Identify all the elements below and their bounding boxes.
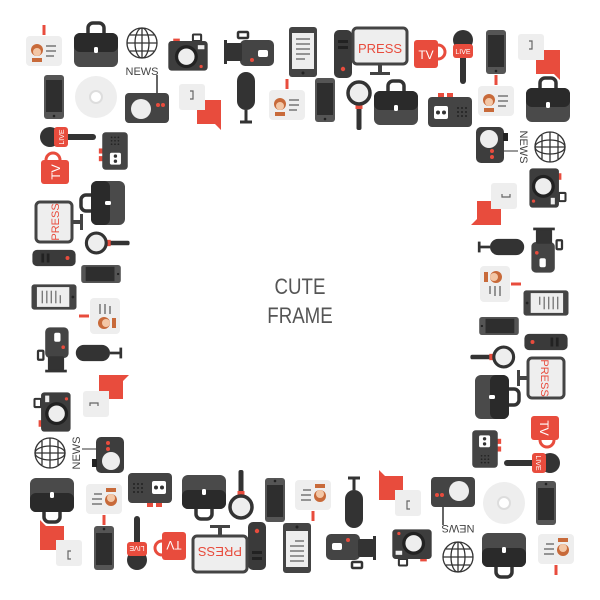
icon: press monitor rotated: [517, 358, 564, 398]
icon: press monitor: [193, 525, 247, 572]
icon: computer tower: [248, 522, 266, 570]
icon: press monitor: [353, 28, 407, 75]
icon: chat bubbles: [379, 470, 421, 516]
icon: tablet: [289, 27, 317, 77]
icon: globe news rotated: [35, 436, 83, 470]
icon: projector camera: [82, 437, 124, 473]
frame: top half: [26, 23, 570, 473]
icon: TV mug: TV: [166, 538, 182, 552]
icon: id badge: [295, 480, 331, 521]
icon: phone horizontal: [479, 317, 519, 335]
icon: id badge: [269, 79, 305, 120]
icon: disc: [75, 76, 117, 118]
icon: magnifier: [230, 470, 252, 518]
icon: globe news: [126, 28, 158, 78]
icon: live microphone: LIVE: [455, 49, 471, 56]
icon: globe news rotated: NEWS: [517, 130, 529, 164]
icon: tower horizontal: [32, 250, 76, 266]
icon: phone: [94, 526, 114, 570]
icon: TV mug rotated: TV: [49, 164, 63, 180]
icon: globe news rotated: [517, 130, 565, 164]
icon: press monitor: PRESS: [358, 41, 402, 56]
icon: tablet horizontal: [524, 290, 568, 316]
icon: camera: [392, 529, 432, 566]
icon: video camera vertical: [38, 327, 69, 372]
icon: phone: [44, 75, 64, 119]
icon: briefcase: [374, 81, 418, 125]
icon: briefcase: [482, 533, 526, 577]
icon: phone: [315, 78, 335, 122]
icon: live microphone horizontal: [504, 453, 560, 473]
icon: press monitor rotated: PRESS: [50, 203, 62, 241]
icon: TV mug: [155, 532, 186, 560]
icon: microphone horizontal: [479, 239, 524, 255]
icon: disc: [483, 482, 525, 524]
title: FRAME: [267, 305, 333, 328]
icon: recorder: [428, 93, 472, 127]
frame: bottom half (rotated copy): [30, 127, 574, 577]
icon: briefcase: [74, 23, 118, 67]
icon: tablet horizontal: [32, 284, 76, 310]
icon: chat bubbles: [83, 375, 129, 417]
icon: microphone horizontal: [76, 345, 121, 361]
icon: camera rotated: [34, 392, 71, 432]
icon: phone: [265, 478, 285, 522]
icon: video camera: [224, 32, 274, 66]
icon: TV mug: TV: [418, 48, 434, 62]
icon: briefcase rotated: [81, 181, 125, 225]
icon: id badge rotated: [480, 266, 521, 302]
icon: press monitor rotated: PRESS: [538, 359, 550, 397]
title: CUTE: [275, 276, 325, 299]
icon: chat bubbles: [40, 520, 82, 566]
icon: chat bubbles: [471, 183, 517, 225]
icon: id badge: [86, 484, 122, 525]
icon: radio: [431, 477, 475, 525]
icon: live microphone horizontal: [40, 127, 96, 147]
icon: radio: [125, 75, 169, 123]
icon: recorder vertical: [99, 132, 128, 170]
icon: briefcase rotated: [475, 375, 519, 419]
icon: magnifier: [348, 82, 370, 130]
icon: magnifier horizontal: [470, 347, 514, 367]
icon: live microphone: [453, 30, 473, 84]
icon: id badge rotated: [79, 298, 120, 334]
icon: microphone: [345, 478, 363, 528]
icon: id badge: [26, 25, 62, 66]
icon: briefcase: [526, 78, 570, 122]
icon: video camera: [326, 534, 376, 568]
icon: globe news: NEWS: [126, 66, 158, 78]
icon: tablet: [283, 523, 311, 573]
icon: tower horizontal: [524, 334, 568, 350]
icon: id badge: [478, 75, 514, 116]
icon: recorder vertical: [472, 430, 501, 468]
icon: magnifier horizontal: [86, 233, 130, 253]
icon: chat bubbles: [518, 34, 560, 80]
icon: projector camera: [476, 127, 518, 163]
icon: TV mug: [414, 40, 445, 68]
icon: globe news: NEWS: [442, 522, 474, 534]
icon: TV mug rotated: [531, 416, 559, 447]
icon: computer tower: [334, 30, 352, 78]
icon: recorder: [128, 473, 172, 507]
icon: chat bubbles: [179, 84, 221, 130]
icon: TV mug rotated: [41, 153, 69, 184]
icon: globe news rotated: NEWS: [71, 436, 83, 470]
icon: live microphone: LIVE: [129, 544, 145, 551]
icon: live microphone horizontal: LIVE: [59, 129, 66, 145]
icon: camera: [168, 34, 208, 71]
icon: phone horizontal: [81, 265, 121, 283]
icon: live microphone: [127, 516, 147, 570]
title: [267, 276, 333, 328]
icon: press monitor rotated: [36, 202, 83, 242]
icon: camera rotated: [529, 168, 566, 208]
icon: phone: [486, 30, 506, 74]
icon: briefcase: [182, 475, 226, 519]
icon: id badge: [538, 534, 574, 575]
icon: microphone: [237, 72, 255, 122]
icon: globe news: [442, 522, 474, 572]
icon: briefcase: [30, 478, 74, 522]
icon: phone: [536, 481, 556, 525]
icon: video camera vertical: [531, 228, 562, 273]
icon: press monitor: PRESS: [198, 544, 242, 559]
icon: live microphone horizontal: LIVE: [534, 455, 541, 471]
icon: TV mug rotated: TV: [537, 420, 551, 436]
